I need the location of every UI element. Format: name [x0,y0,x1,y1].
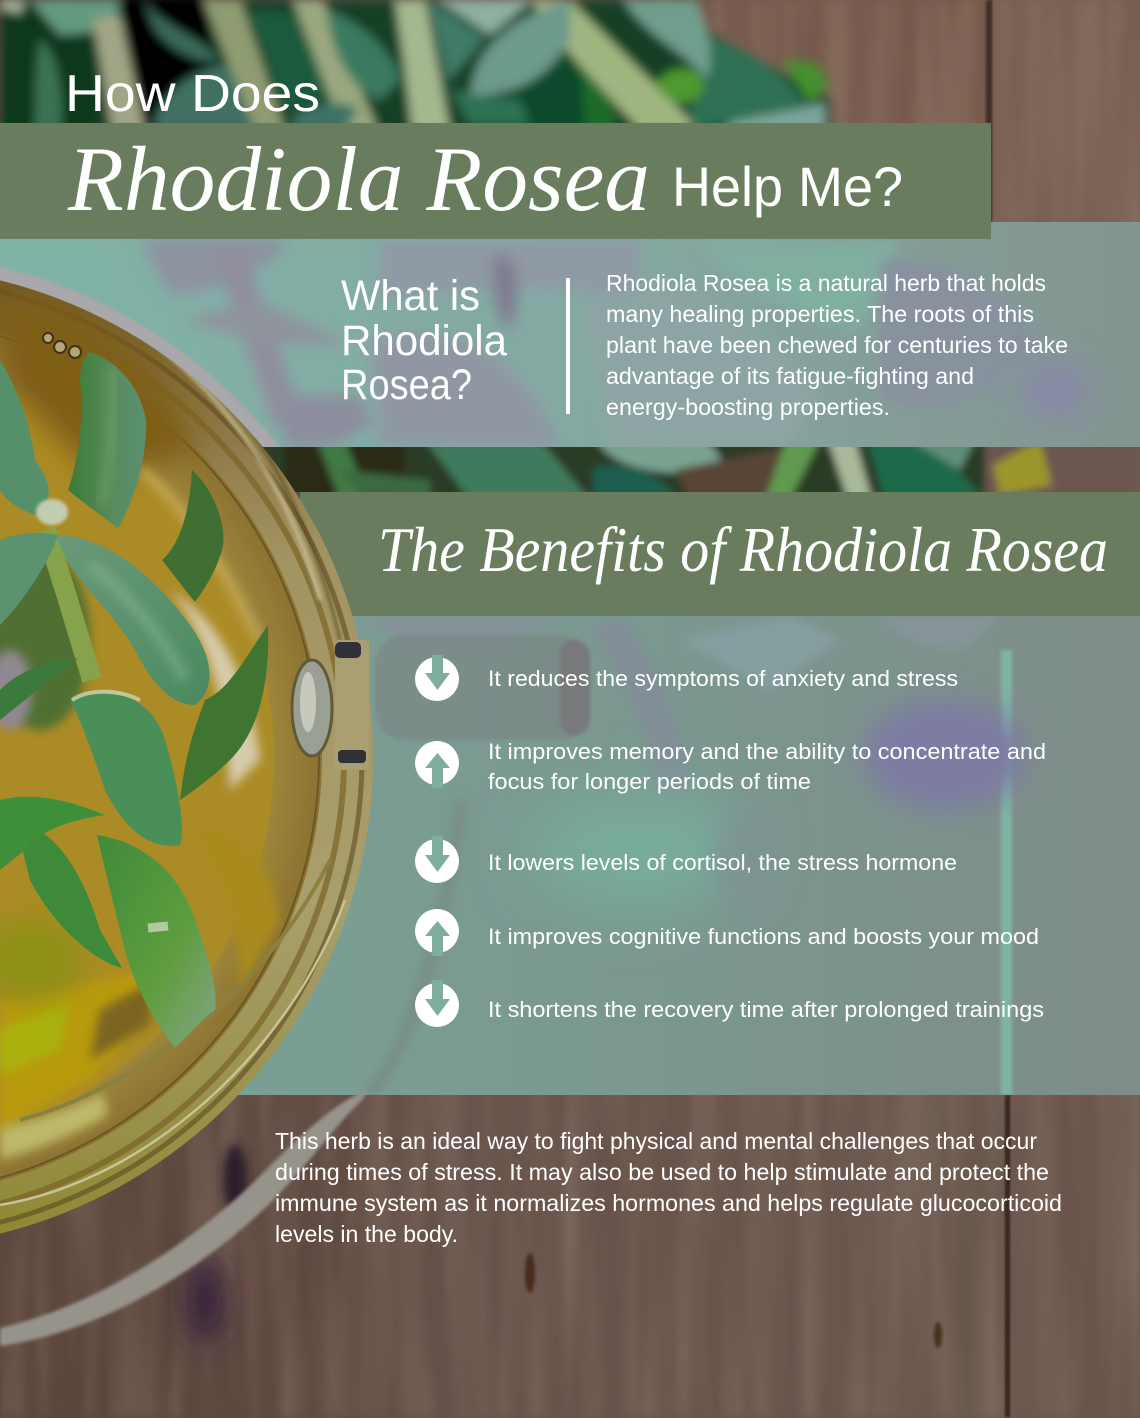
glass bowl of tea with herb leaves [0,266,373,1248]
saucer rim arc [0,1090,368,1346]
leaf lower centre [70,693,182,846]
benefit 3 [415,836,957,883]
panel: what is Rhodiola Rosea background [0,222,1140,447]
leaf lower left [15,820,122,968]
text block: closing paragraph: during times of stress. It may also be used to help stimulate and protect the [275,1159,1049,1185]
leaf upper left [0,360,49,515]
heading: What is Rhodiola Rosea?: What is [341,272,480,320]
strip of leaves between the panels [263,447,1120,492]
leaf big centre [56,535,209,705]
herb stems [46,530,92,680]
text block: closing paragraph [275,1128,1062,1247]
icon: up arrow [415,909,459,956]
vertical divider [566,278,570,414]
benefit 2: It improves memory and the ability to concentrate and [488,739,1046,764]
text block: what is description [606,270,1068,420]
leaf highlights [72,370,185,928]
leaf left centre [0,533,58,625]
benefit 5 [415,980,1044,1027]
air bubbles on the glass [43,333,81,358]
title script: Rhodiola Rosea: Rhodiola Rosea [67,128,650,230]
text block: closing paragraph: immune system as it normalizes hormones and helps regulate glucocorticoid [275,1190,1062,1216]
panel: benefits list background [238,616,1140,1095]
benefit 4 [415,909,1039,956]
stem knot [36,499,68,525]
faded cup handle [375,635,590,740]
text block: what is description: advantage of its fatigue-fighting and [606,363,974,389]
icon: down arrow [415,980,459,1027]
leaf crossing left [0,797,105,870]
benefit 2 [415,739,1046,794]
blurred green leaves at top of the page [0,0,830,135]
benefit 1 [415,655,958,701]
icon: up arrow [415,741,459,788]
heading: What is Rhodiola Rosea?: Rhodiola [341,317,507,365]
leaf small left [0,658,78,720]
benefit 1: It reduces the symptoms of anxiety and stress [488,666,958,691]
text block: what is description: energy-boosting properties. [606,394,890,420]
bowl handle clasp [292,640,369,770]
text block: closing paragraph: This herb is an ideal way to fight physical and mental challenges that occur [275,1128,1037,1154]
title line: Help Me?: Help Me? [672,155,903,218]
title line: How Does: How Does [65,65,320,123]
benefit 2: focus for longer periods of time [488,769,811,794]
leaf long bottom [97,835,216,1048]
text block: what is description: plant have been chewed for centuries to take [606,332,1068,358]
benefit 3: It lowers levels of cortisol, the stress hormone [488,850,957,875]
banner: main title [0,123,991,239]
banner: benefits heading [300,492,1140,616]
leaf tall right [162,470,223,602]
icon: down arrow [415,655,459,701]
text block: what is description: Rhodiola Rosea is a natural herb that holds [606,270,1046,296]
benefit 5: It shortens the recovery time after prolonged trainings [488,997,1044,1022]
heading: What is Rhodiola Rosea?: Rosea? [341,361,472,409]
text block: closing paragraph: levels in the body. [275,1221,458,1247]
faint saucer rim through panel [368,800,462,1095]
benefit 4: It improves cognitive functions and boosts your mood [488,924,1039,949]
leaf lower right [180,625,268,800]
leaf top centre [68,352,146,528]
text block: what is description: many healing properties. The roots of this [606,301,1034,327]
icon: down arrow [415,836,459,883]
heading: What is Rhodiola Rosea? [341,272,507,409]
